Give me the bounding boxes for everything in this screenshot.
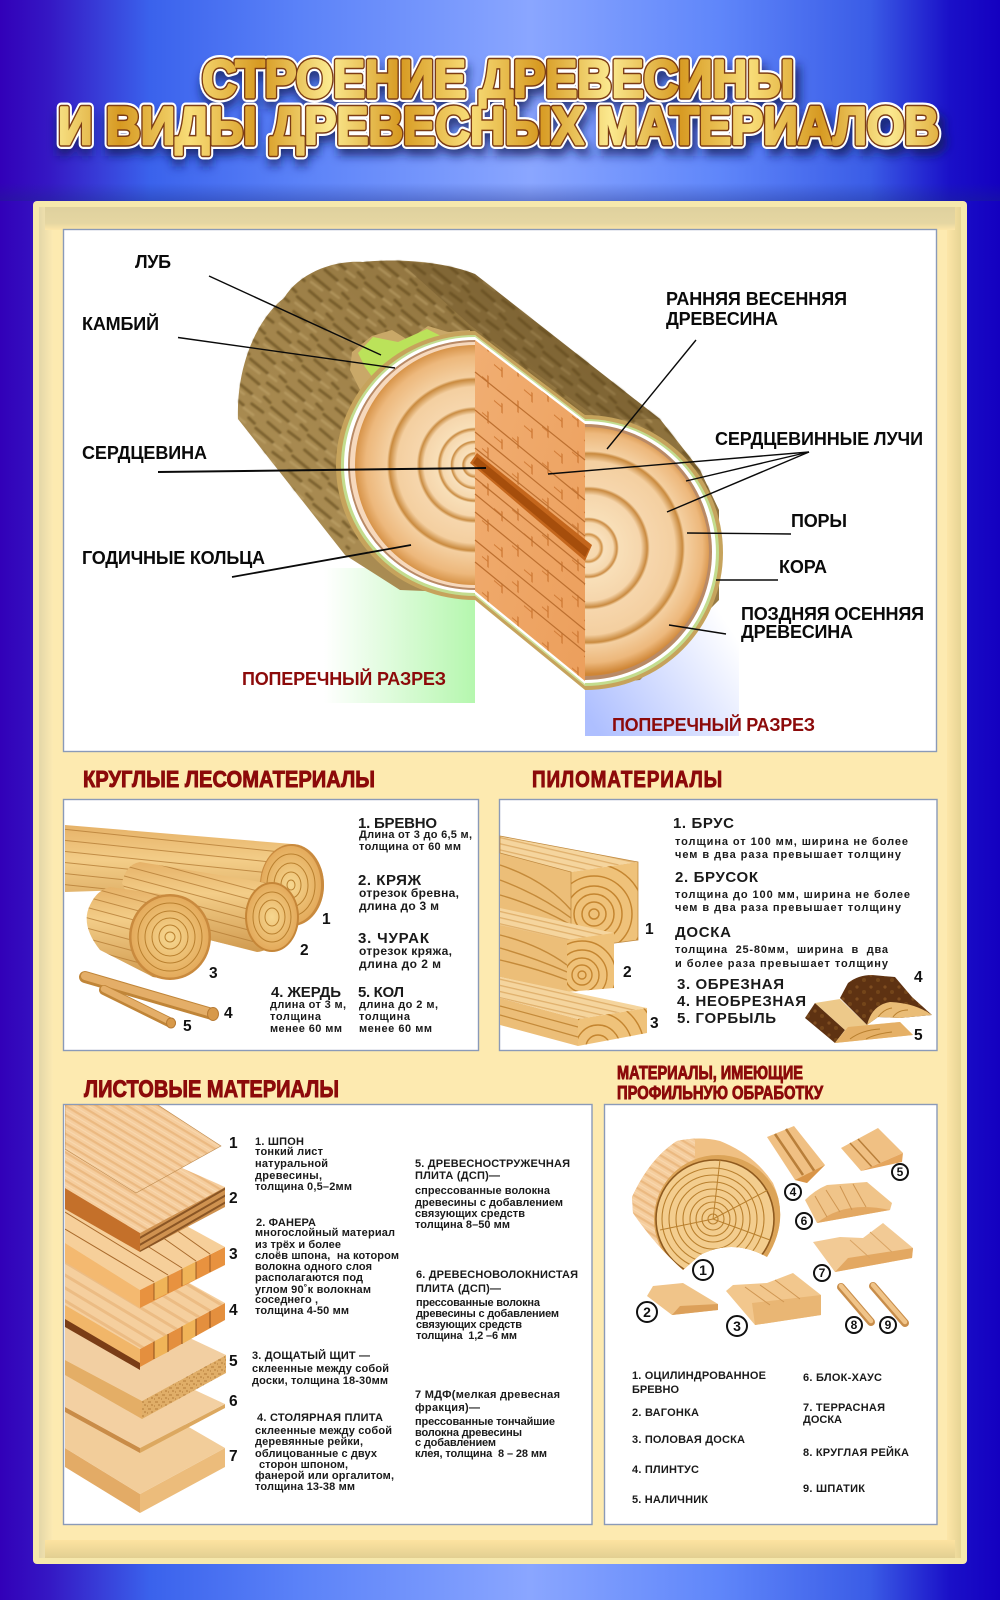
heading: sheet materials: ЛИСТОВЫЕ МАТЕРИАЛЫ xyxy=(84,1076,339,1103)
text: plywood: соседнего , xyxy=(255,1294,318,1306)
circle numbers: 8 xyxy=(851,1318,858,1332)
numbers: 4 xyxy=(914,969,923,986)
text: zherd: 4. ЖЕРДЬ xyxy=(271,984,341,1001)
labels: ДРЕВЕСИНА xyxy=(666,309,778,329)
legend left column: 4. ПЛИНТУС xyxy=(632,1464,699,1476)
legend right column: 6. БЛОК-ХАУС xyxy=(803,1372,882,1384)
panel: wood structure diagram xyxy=(64,230,936,752)
title: И ВИДЫ ДРЕВЕСНЫХ МАТЕРИАЛОВ xyxy=(58,97,939,156)
blue section background xyxy=(585,500,739,736)
text: particle board: спрессованные волокна xyxy=(415,1185,551,1197)
cambium green layer xyxy=(358,329,470,400)
numbers: 3 xyxy=(229,1246,238,1263)
text: kryazh xyxy=(358,872,459,913)
text: plywood: толщина 4-50 мм xyxy=(255,1305,349,1317)
text: churak xyxy=(358,930,452,971)
text: board panel: доски, толщина 18-30мм xyxy=(252,1375,388,1387)
numbers: 2 xyxy=(300,942,309,959)
text: particle board: ПЛИТА (ДСП)— xyxy=(415,1170,500,1182)
text: veneer: толщина 0,5–2мм xyxy=(255,1181,352,1193)
text: zherd: менее 60 мм xyxy=(270,1023,342,1035)
text: particle board: 5. ДРЕВЕСНОСТРУЖЕЧНАЯ xyxy=(415,1158,570,1170)
text: kol: длина до 2 м, xyxy=(359,999,438,1011)
labels: ПОРЫ xyxy=(791,511,847,531)
labels: ДРЕВЕСИНА xyxy=(741,622,853,642)
title: СТРОЕНИЕ ДРЕВЕСИНЫ xyxy=(202,50,794,109)
numbers: 5 xyxy=(229,1353,238,1370)
log illustration xyxy=(238,260,723,690)
heading: sawn timber: ПИЛОМАТЕРИАЛЫ xyxy=(532,766,723,792)
labels: ЛУБ xyxy=(135,252,171,272)
labels xyxy=(82,252,924,735)
text: churak: отрезок кряжа, xyxy=(359,944,452,958)
wedge cut xyxy=(475,331,585,690)
text: board panel: склеенные между собой xyxy=(252,1363,389,1375)
sheet 5 xyxy=(65,1300,226,1419)
text: veneer: тонкий лист xyxy=(255,1146,324,1158)
item 8: round rail xyxy=(841,1286,871,1322)
labels: ГОДИЧНЫЕ КОЛЬЦА xyxy=(82,548,265,568)
panel: sheet materials xyxy=(64,1104,592,1524)
text: blockboard: сторон шпоном, xyxy=(259,1459,348,1471)
title: СТРОЕНИЕ ДРЕВЕСИНЫ xyxy=(202,58,800,117)
legend right column: 9. ШПАТИК xyxy=(803,1483,865,1495)
numbers: 1 xyxy=(645,921,654,938)
pole 5 xyxy=(104,989,176,1028)
text: kryazh: отрезок бревна, xyxy=(359,886,459,900)
text: board: толщина 25-80мм, ширина в два xyxy=(675,944,889,956)
text: board panel: 3. ДОЩАТЫЙ ЩИТ — xyxy=(252,1349,370,1362)
text: fibre board: ПЛИТА (ДСП)— xyxy=(416,1283,501,1295)
right cross-section rings xyxy=(585,427,709,676)
text: log: толщина от 60 мм xyxy=(359,841,461,853)
sheet 6 xyxy=(65,1350,225,1453)
text: plywood: углом 90˚к волокнам xyxy=(255,1284,371,1296)
heading: round timber: КРУГЛЫЕ ЛЕСОМАТЕРИАЛЫ xyxy=(83,766,375,792)
circle numbers: 3 xyxy=(733,1318,741,1334)
panel: sawn timber xyxy=(498,798,938,1052)
legend left column: 2. ВАГОНКА xyxy=(632,1407,699,1419)
cream frame xyxy=(33,201,967,1564)
item 6: block house xyxy=(805,1182,892,1223)
text: kryazh: длина до 3 м xyxy=(359,899,439,913)
title: СТРОЕНИЕ ДРЕВЕСИНЫ xyxy=(202,50,794,109)
text: fibre board xyxy=(416,1269,578,1342)
labels: ПОПЕРЕЧНЫЙ РАЗРЕЗ xyxy=(612,714,815,735)
text: log: 1. БРЕВНО xyxy=(358,815,437,832)
pith bar xyxy=(470,453,592,561)
title xyxy=(57,50,946,164)
sheet 2 xyxy=(65,1150,225,1252)
text: MDF: с добавлением xyxy=(415,1437,496,1449)
item 7: terrace board xyxy=(813,1223,913,1272)
circle numbers: 9 xyxy=(885,1318,892,1332)
text: fibre board: связующих средств xyxy=(416,1319,522,1331)
numbers: 5 xyxy=(914,1027,923,1044)
sheet 3 xyxy=(65,1180,225,1308)
item 5: trim xyxy=(841,1128,903,1171)
numbers xyxy=(229,1135,238,1465)
sheet 7 xyxy=(65,1407,225,1513)
numbered circles xyxy=(637,1164,908,1336)
text: fibre board: 6. ДРЕВЕСНОВОЛОКНИСТАЯ xyxy=(416,1269,578,1281)
log 1 xyxy=(65,825,324,926)
legend right column: ДОСКА xyxy=(803,1414,842,1426)
text: board xyxy=(675,924,889,970)
item 2: lining xyxy=(647,1283,718,1315)
title: И ВИДЫ ДРЕВЕСНЫХ МАТЕРИАЛОВ xyxy=(58,97,939,156)
numbers: 4 xyxy=(224,1005,233,1022)
title: И ВИДЫ ДРЕВЕСНЫХ МАТЕРИАЛОВ xyxy=(57,105,946,164)
text: plywood: 2. ФАНЕРА xyxy=(256,1217,316,1229)
numbers: 1 xyxy=(229,1135,238,1152)
labels: СЕРДЦЕВИНА xyxy=(82,443,207,463)
legend left column: 5. НАЛИЧНИК xyxy=(632,1494,708,1506)
text: particle board xyxy=(415,1158,570,1231)
text: kol: толщина xyxy=(359,1011,411,1023)
circle numbers: 1 xyxy=(699,1262,707,1278)
text: veneer: древесины, xyxy=(255,1170,322,1182)
text: zherd: толщина xyxy=(270,1011,322,1023)
text: kol xyxy=(358,984,438,1035)
text: brus: 1. БРУС xyxy=(673,815,734,832)
item 3: floor board xyxy=(726,1273,821,1325)
text: kryazh: 2. КРЯЖ xyxy=(358,872,421,889)
text: plywood: из трёх и более xyxy=(255,1239,341,1251)
panel: round timber xyxy=(64,800,478,1050)
circle numbers: 5 xyxy=(897,1165,904,1179)
numbers xyxy=(623,921,923,1044)
numbers: 1 xyxy=(322,911,331,928)
slab and waney board xyxy=(805,975,932,1043)
pole 4 xyxy=(85,976,218,1020)
legend right column: 7. ТЕРРАСНАЯ xyxy=(803,1402,885,1414)
text: kol: 5. КОЛ xyxy=(358,984,404,1001)
item 1: rounded log xyxy=(632,1138,780,1270)
text: veneer: 1. ШПОН xyxy=(255,1136,304,1148)
text: MDF: клея, толщина 8 – 28 мм xyxy=(415,1448,547,1460)
circle numbers xyxy=(643,1165,904,1334)
text: brusok: толщина до 100 мм, ширина не более xyxy=(675,889,910,901)
text: MDF: фракция)— xyxy=(415,1402,480,1414)
heading: profile materials: МАТЕРИАЛЫ, ИМЕЮЩИЕ xyxy=(617,1063,803,1083)
circle numbers: 4 xyxy=(790,1185,797,1199)
text: brus: толщина от 100 мм, ширина не более xyxy=(675,836,908,848)
pointer lines xyxy=(158,276,809,634)
labels: КОРА xyxy=(779,557,827,577)
text: kol: менее 60 мм xyxy=(359,1023,432,1035)
numbers: 3 xyxy=(209,965,218,982)
text: fibre board: толщина 1,2 –6 мм xyxy=(416,1330,517,1342)
text: board types: 5. ГОРБЫЛЬ xyxy=(677,1010,776,1027)
text: MDF xyxy=(415,1389,560,1460)
circle numbers: 7 xyxy=(819,1266,826,1280)
numbers: 7 xyxy=(229,1448,238,1465)
text: board: ДОСКА xyxy=(675,924,731,941)
labels: СЕРДЦЕВИННЫЕ ЛУЧИ xyxy=(715,429,923,449)
text: plywood: волокна одного слоя xyxy=(255,1261,372,1273)
text: particle board: толщина 8–50 мм xyxy=(415,1219,510,1231)
text: plywood: слоёв шпона, на котором xyxy=(255,1250,399,1262)
text: veneer xyxy=(255,1136,352,1193)
text: plywood: многослойный материал xyxy=(255,1227,395,1239)
legend right column: 8. КРУГЛАЯ РЕЙКА xyxy=(803,1446,909,1459)
numbers: 5 xyxy=(183,1018,192,1035)
numbers xyxy=(183,911,331,1035)
panel: profiled materials xyxy=(604,1104,937,1524)
text: brusok: чем в два раза превышает толщину xyxy=(675,902,902,914)
labels: ПОЗДНЯЯ ОСЕННЯЯ xyxy=(741,604,924,624)
title: И ВИДЫ ДРЕВЕСНЫХ МАТЕРИАЛОВ xyxy=(58,97,939,156)
item 9: shpatik xyxy=(873,1285,905,1323)
text: MDF: волокна древесины xyxy=(415,1427,522,1439)
text: brus: чем в два раза превышает толщину xyxy=(675,849,902,861)
text: blockboard xyxy=(255,1412,394,1493)
text: board types: 3. ОБРЕЗНАЯ xyxy=(677,976,784,993)
text: brusok: 2. БРУСОК xyxy=(675,869,759,886)
right cross-section rim xyxy=(585,415,723,690)
text: particle board: древесины с добавлением xyxy=(415,1197,563,1209)
text: blockboard: склеенные между собой xyxy=(255,1425,392,1437)
text: churak: длина до 2 м xyxy=(359,957,441,971)
text: churak: 3. ЧУРАК xyxy=(358,930,430,947)
log 2 xyxy=(122,862,299,952)
numbers: 2 xyxy=(229,1190,238,1207)
text: MDF: 7 МДФ(мелкая древесная xyxy=(415,1389,560,1401)
text: blockboard: деревянные рейки, xyxy=(255,1436,363,1448)
title: СТРОЕНИЕ ДРЕВЕСИНЫ xyxy=(202,50,794,109)
legend left column xyxy=(632,1370,766,1506)
text: board types: 4. НЕОБРЕЗНАЯ xyxy=(677,993,806,1010)
text: blockboard: облицованные с двух xyxy=(255,1448,378,1460)
sheet 4 xyxy=(65,1240,225,1370)
text: fibre board: прессованные волокна xyxy=(416,1297,541,1309)
beam 3 xyxy=(500,977,647,1046)
text: brus xyxy=(673,815,908,861)
item 4: skirting xyxy=(767,1126,825,1183)
text: blockboard: 4. СТОЛЯРНАЯ ПЛИТА xyxy=(257,1412,383,1424)
text: log: Длина от 3 до 6,5 м, xyxy=(359,829,472,841)
green section background xyxy=(324,568,475,703)
numbers: 2 xyxy=(623,964,632,981)
heading: profile materials xyxy=(617,1063,824,1103)
legend left column: БРЕВНО xyxy=(632,1384,679,1396)
left cross-section rim xyxy=(336,331,475,600)
text: board types xyxy=(677,976,806,1027)
numbers: 3 xyxy=(650,1015,659,1032)
numbers: 4 xyxy=(229,1302,238,1319)
text: board: и более раза превышает толщину xyxy=(675,958,889,970)
text: plywood: располагаются под xyxy=(255,1272,363,1284)
log 3 xyxy=(87,887,211,980)
labels: ПОПЕРЕЧНЫЙ РАЗРЕЗ xyxy=(242,668,446,689)
text: veneer: натуральной xyxy=(255,1158,328,1170)
labels: РАННЯЯ ВЕСЕННЯЯ xyxy=(666,289,847,309)
text: zherd xyxy=(270,984,346,1035)
legend left column: 1. ОЦИЛИНДРОВАННОЕ xyxy=(632,1370,766,1382)
text: plywood xyxy=(255,1217,399,1317)
circle numbers: 2 xyxy=(643,1304,651,1320)
heading: profile materials: ПРОФИЛЬНУЮ ОБРАБОТКУ xyxy=(617,1083,824,1103)
text: log xyxy=(358,815,472,853)
legend right column xyxy=(803,1372,909,1495)
labels: КАМБИЙ xyxy=(82,313,159,334)
text: zherd: длина от 3 м, xyxy=(270,999,346,1011)
stacked sheets illustration xyxy=(65,1105,226,1513)
text: brusok xyxy=(675,869,910,914)
sheet 1 xyxy=(65,1105,221,1193)
text: particle board: связующих средств xyxy=(415,1208,525,1220)
legend left column: 3. ПОЛОВАЯ ДОСКА xyxy=(632,1434,745,1446)
circle numbers: 6 xyxy=(801,1214,808,1228)
beam 2 xyxy=(500,908,614,992)
text: board panel xyxy=(252,1349,389,1387)
beam 1 xyxy=(500,836,638,944)
numbers: 6 xyxy=(229,1393,238,1410)
text: blockboard: фанерой или оргалитом, xyxy=(255,1470,394,1482)
text: blockboard: толщина 13-38 мм xyxy=(255,1481,355,1493)
text: MDF: прессованные тончайшие xyxy=(415,1416,555,1428)
left cross-section rings xyxy=(355,345,475,585)
text: fibre board: древесины с добавлением xyxy=(416,1308,559,1320)
